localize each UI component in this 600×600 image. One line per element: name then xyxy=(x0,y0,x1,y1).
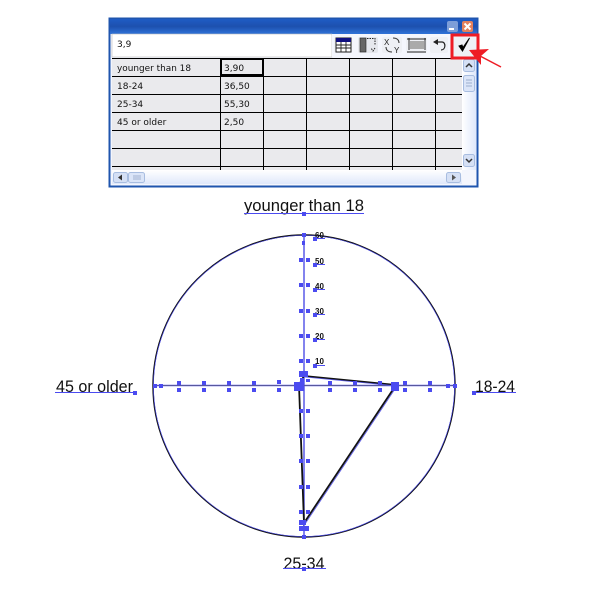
icon: close button xyxy=(462,21,473,32)
label: 45 or older: 45 or older xyxy=(56,377,133,396)
axis scale labels xyxy=(315,231,324,366)
axes xyxy=(153,235,455,537)
icon: apply check mark xyxy=(452,35,477,57)
row: 25-34 xyxy=(117,100,250,110)
panel: graph data window xyxy=(110,18,478,186)
window frame xyxy=(110,18,478,186)
selected cell xyxy=(221,59,263,75)
toolbar background xyxy=(332,34,475,57)
row: 18-24: 36,50 xyxy=(224,82,250,92)
horizontal scrollbar xyxy=(112,170,462,184)
row: 18-24 xyxy=(117,82,250,92)
icon: minimize button xyxy=(447,21,458,32)
icon: cell style xyxy=(406,37,427,53)
axis scale labels: 60 xyxy=(315,231,324,240)
icon: import data xyxy=(334,37,352,53)
icon: switch x y xyxy=(382,37,402,55)
label: 18-24: 18-24 xyxy=(475,377,515,396)
axis scale underlines xyxy=(313,237,325,368)
arrow: red arrow pointing at check mark xyxy=(469,49,501,67)
chart: radar chart xyxy=(153,231,457,539)
axis scale labels: 50 xyxy=(315,257,324,266)
data grid xyxy=(112,58,462,170)
axis scale labels: 40 xyxy=(315,282,324,291)
icon: switch x y: X xyxy=(384,38,390,47)
row: 45 or older: 45 or older xyxy=(117,118,167,128)
axis scale labels: 30 xyxy=(315,307,324,316)
label: 25-34: 25-34 xyxy=(284,554,324,573)
data polygon xyxy=(299,376,396,523)
label: younger than 18: younger than 18 xyxy=(244,196,364,215)
row: 25-34: 25-34 xyxy=(117,100,143,110)
row: younger than 18: younger than 18 xyxy=(117,64,191,74)
axis scale labels: 20 xyxy=(315,332,324,341)
icon: switch x y: Y xyxy=(394,46,400,55)
selection handles xyxy=(153,233,457,539)
callout: red highlight box around apply button xyxy=(452,35,478,58)
input field xyxy=(112,34,332,57)
row: 18-24: 18-24 xyxy=(117,82,143,92)
chart circle xyxy=(153,235,455,537)
row: 45 or older: 2,50 xyxy=(224,118,244,128)
row: 45 or older xyxy=(117,118,244,128)
vertical scrollbar xyxy=(462,58,476,170)
axis scale labels: 10 xyxy=(315,357,324,366)
row: younger than 18 xyxy=(117,64,244,74)
icon: transpose xyxy=(358,37,378,53)
row: younger than 18: 3,90 xyxy=(224,64,244,74)
title bar xyxy=(110,19,477,34)
row: 25-34: 55,30 xyxy=(224,100,250,110)
icon: revert xyxy=(430,37,448,53)
input field: 3,9 xyxy=(117,40,132,50)
